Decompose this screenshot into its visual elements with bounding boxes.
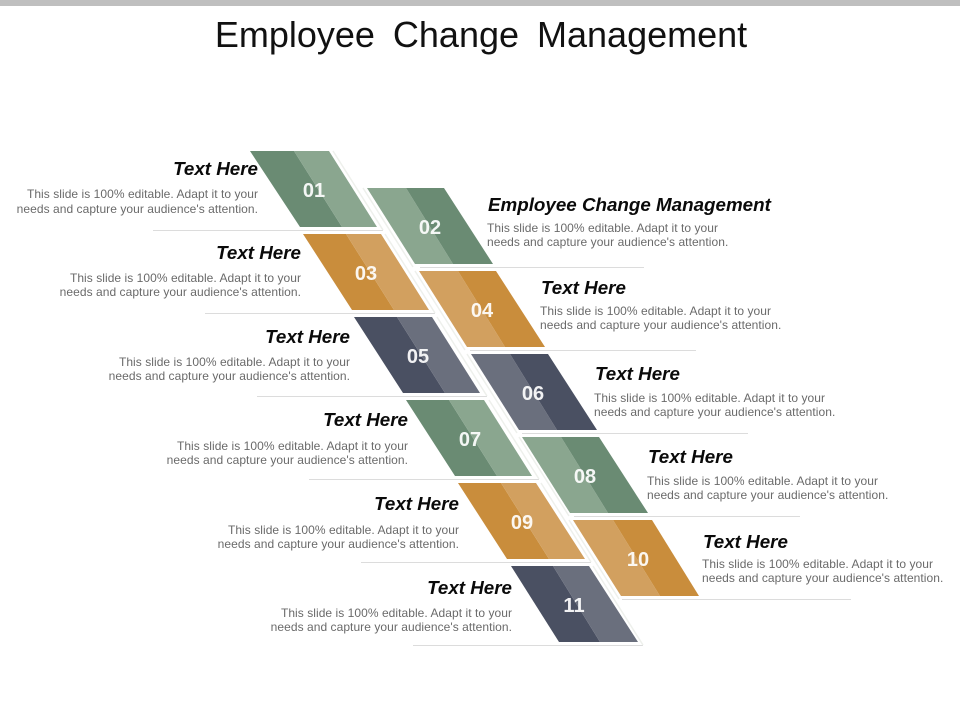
- step 06: needs and capture your audience's attention.: [594, 405, 835, 419]
- step 07: This slide is 100% editable. Adapt it to your: [177, 439, 408, 453]
- step 02: [367, 188, 772, 264]
- step 01: [17, 151, 377, 227]
- step 10: 10: [627, 549, 649, 571]
- step 10: This slide is 100% editable. Adapt it to your: [702, 557, 933, 571]
- step 01: Text Here: [173, 158, 258, 179]
- step 03: [60, 234, 429, 310]
- step 08: Text Here: [648, 446, 733, 467]
- step 01: needs and capture your audience's attention.: [17, 202, 258, 216]
- step 09: needs and capture your audience's attention.: [218, 537, 459, 551]
- step 05: needs and capture your audience's attention.: [109, 369, 350, 383]
- step 07: 07: [459, 429, 481, 451]
- step 02: needs and capture your audience's attention.: [487, 235, 728, 249]
- step 05: 05: [407, 346, 429, 368]
- step 09: 09: [511, 512, 533, 534]
- step 11: needs and capture your audience's attention.: [271, 620, 512, 634]
- step 02: 02: [419, 217, 441, 239]
- step 11: 11: [563, 595, 585, 617]
- step 04: 04: [471, 300, 494, 322]
- step 04: This slide is 100% editable. Adapt it to your: [540, 304, 771, 318]
- top bar: [0, 0, 960, 6]
- title: Employee Change Management: [215, 14, 747, 55]
- step 08: 08: [574, 466, 596, 488]
- step 06: [471, 354, 835, 430]
- step 05: This slide is 100% editable. Adapt it to your: [119, 355, 350, 369]
- step 10: needs and capture your audience's attention.: [702, 571, 943, 585]
- step 10: Text Here: [703, 531, 788, 552]
- step 05: [109, 317, 480, 393]
- step 01: 01: [303, 180, 325, 202]
- step 06: This slide is 100% editable. Adapt it to your: [594, 391, 825, 405]
- step 03: Text Here: [216, 242, 301, 263]
- step 06: 06: [522, 383, 544, 405]
- step 09: [218, 483, 585, 559]
- step 03: This slide is 100% editable. Adapt it to your: [70, 271, 301, 285]
- step 03: needs and capture your audience's attention.: [60, 285, 301, 299]
- step 11: This slide is 100% editable. Adapt it to your: [281, 606, 512, 620]
- step 01: This slide is 100% editable. Adapt it to your: [27, 187, 258, 201]
- step 07: [167, 400, 532, 476]
- step 07: Text Here: [323, 409, 408, 430]
- step 09: Text Here: [374, 493, 459, 514]
- step 10: [573, 520, 943, 596]
- step 05: Text Here: [265, 326, 350, 347]
- step 07: needs and capture your audience's attention.: [167, 453, 408, 467]
- step 08: This slide is 100% editable. Adapt it to your: [647, 474, 878, 488]
- step 11: [271, 566, 638, 642]
- step 04: Text Here: [541, 277, 626, 298]
- step 09: This slide is 100% editable. Adapt it to your: [228, 523, 459, 537]
- step 02: This slide is 100% editable. Adapt it to your: [487, 221, 718, 235]
- step 08: needs and capture your audience's attention.: [647, 488, 888, 502]
- step 04: needs and capture your audience's attention.: [540, 318, 781, 332]
- step 03: 03: [355, 263, 377, 285]
- step 04: [419, 271, 781, 347]
- step 02: Employee Change Management: [488, 194, 772, 215]
- step 06: Text Here: [595, 363, 680, 384]
- step 08: [522, 437, 888, 513]
- step 11: Text Here: [427, 577, 512, 598]
